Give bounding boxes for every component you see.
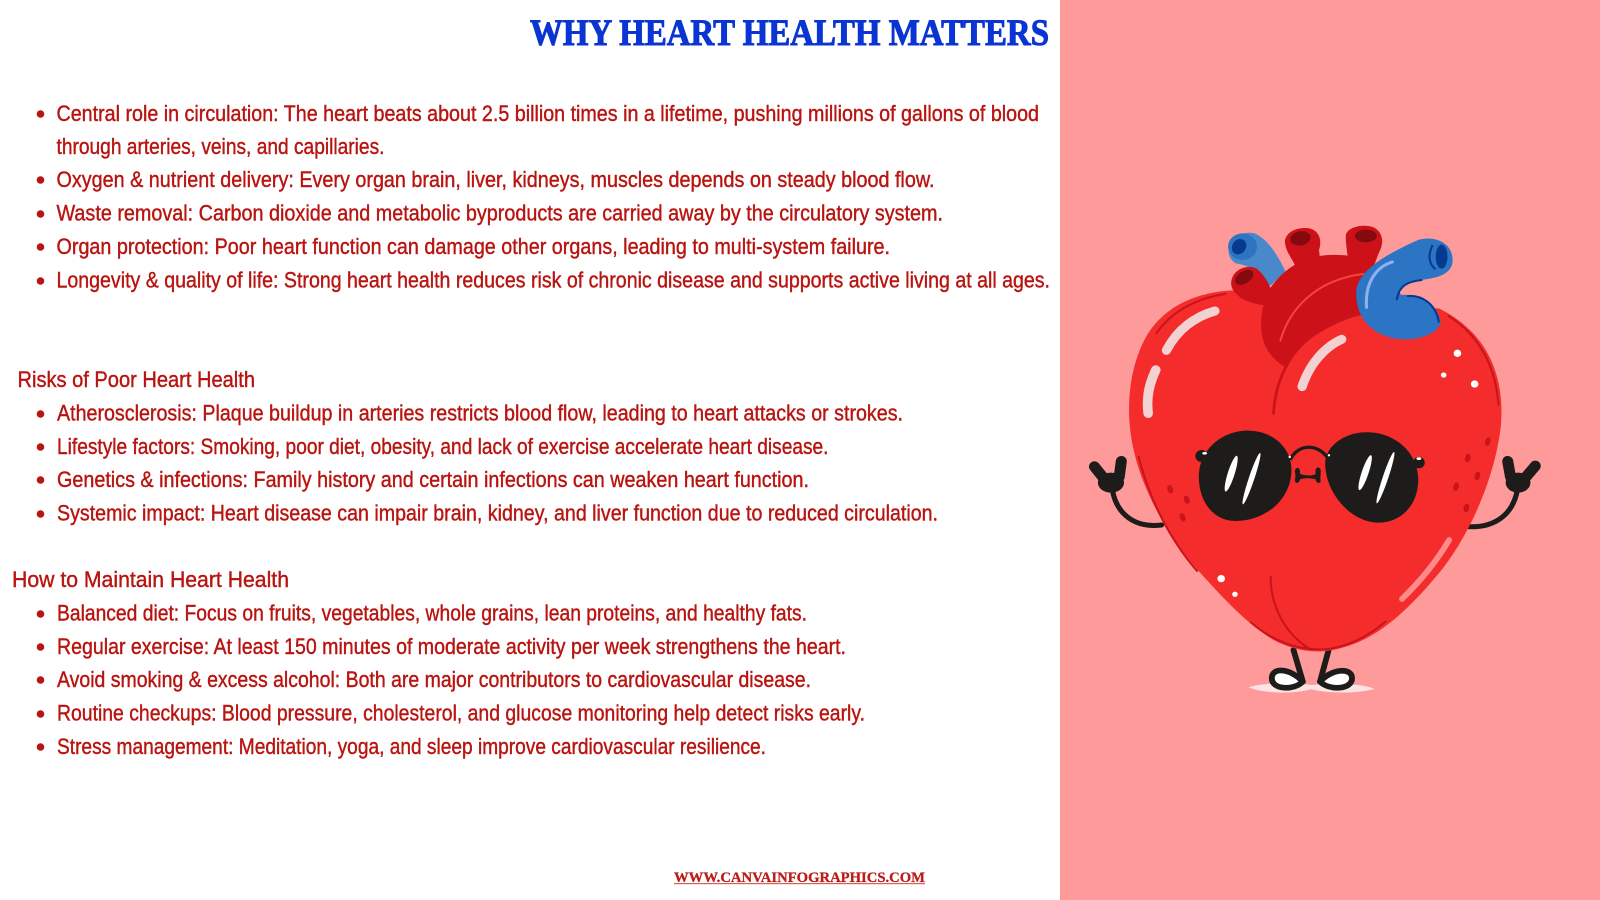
bullet: atherosclerosis: Atherosclerosis: Plaque buildup in arteries restricts blood flow, leading to heart attacks or strokes.: [57, 400, 903, 426]
icon: heart body: [1129, 290, 1501, 651]
bullet: systemic impact: Systemic impact: Heart disease can impair brain, kidney, and liver function due to reduced circulation.: [57, 500, 938, 526]
bullet: genetics and infections: Genetics & infections: Family history and certain infections can weaken heart function.: [57, 467, 809, 492]
panel: pink illustration background: [1060, 0, 1600, 900]
title: WHY HEART HEALTH MATTERS: [530, 13, 1049, 54]
bullet: oxygen and nutrient delivery: Oxygen & nutrient delivery: Every organ brain, liver, kidneys, muscles depends on steady blood flow.: [56, 167, 934, 192]
panel: risks list: [37, 400, 938, 526]
bullet: central role: Central role in circulation: The heart beats about 2.5 billion times in a lifetime, pushing millions of gallons of blood: [56, 101, 1039, 126]
panel: why heart health matters list: [37, 101, 1050, 292]
icon: arms and rock-on hands: [1094, 461, 1535, 527]
bullet: avoid smoking: Avoid smoking & excess alcohol: Both are major contributors to cardiovascular disease.: [57, 667, 811, 692]
bullet: stress management: Stress management: Meditation, yoga, and sleep improve cardiovascular resilience.: [57, 734, 766, 759]
icon: highlights: [1148, 311, 1449, 599]
icon: freckles: [1166, 437, 1492, 522]
bullet: routine checkups: Routine checkups: Blood pressure, cholesterol, and glucose monitoring help detect risks early.: [57, 700, 865, 726]
bullet: lifestyle factors: Lifestyle factors: Smoking, poor diet, obesity, and lack of exercise accelerate heart disease.: [57, 434, 828, 459]
illustration: heart character with sunglasses: [1094, 226, 1535, 693]
bullet: balanced diet: Balanced diet: Focus on fruits, vegetables, whole grains, lean proteins, and healthy fats.: [57, 600, 807, 626]
bullet: central role: through arteries, veins, and capillaries.: [56, 134, 384, 159]
icon: blue vessel details: [1366, 245, 1447, 322]
bullet: organ protection: Organ protection: Poor heart function can damage other organs, leading to multi-system failure.: [56, 234, 890, 259]
footer link: WWW.CANVAINFOGRAPHICS.COM: [674, 870, 925, 886]
heading: how to maintain heart health: How to Maintain Heart Health: [12, 567, 289, 592]
icon: ground shadow: [1249, 683, 1374, 693]
icon: aorta dome: [1261, 255, 1404, 367]
panel: maintenance list: [37, 600, 865, 759]
bullet: longevity: Longevity & quality of life: Strong heart health reduces risk of chronic disease and supports active living at all ages.: [56, 268, 1050, 292]
bullet: regular exercise: Regular exercise: At least 150 minutes of moderate activity per week strengthens the heart.: [57, 634, 846, 659]
icon: back blue vessel: [1228, 233, 1286, 287]
icon: red vessels: [1231, 226, 1382, 307]
bullet: waste removal: Waste removal: Carbon dioxide and metabolic byproducts are carried away by the circulatory system.: [56, 200, 943, 226]
heading: risks of poor heart health: Risks of Poor Heart Health: [18, 367, 255, 392]
icon: legs and feet: [1272, 650, 1352, 688]
icon: vessel openings: [1232, 230, 1377, 288]
icon: sunglasses: [1195, 431, 1425, 523]
icon: sparkle dots: [1217, 350, 1478, 597]
icon: smile mouth: [1295, 467, 1321, 483]
bullet: central role: [37, 101, 1039, 159]
icon: heart contour lines: [1139, 274, 1498, 649]
icon: blue vessel: [1356, 239, 1453, 339]
panel: white background: [0, 0, 1060, 900]
